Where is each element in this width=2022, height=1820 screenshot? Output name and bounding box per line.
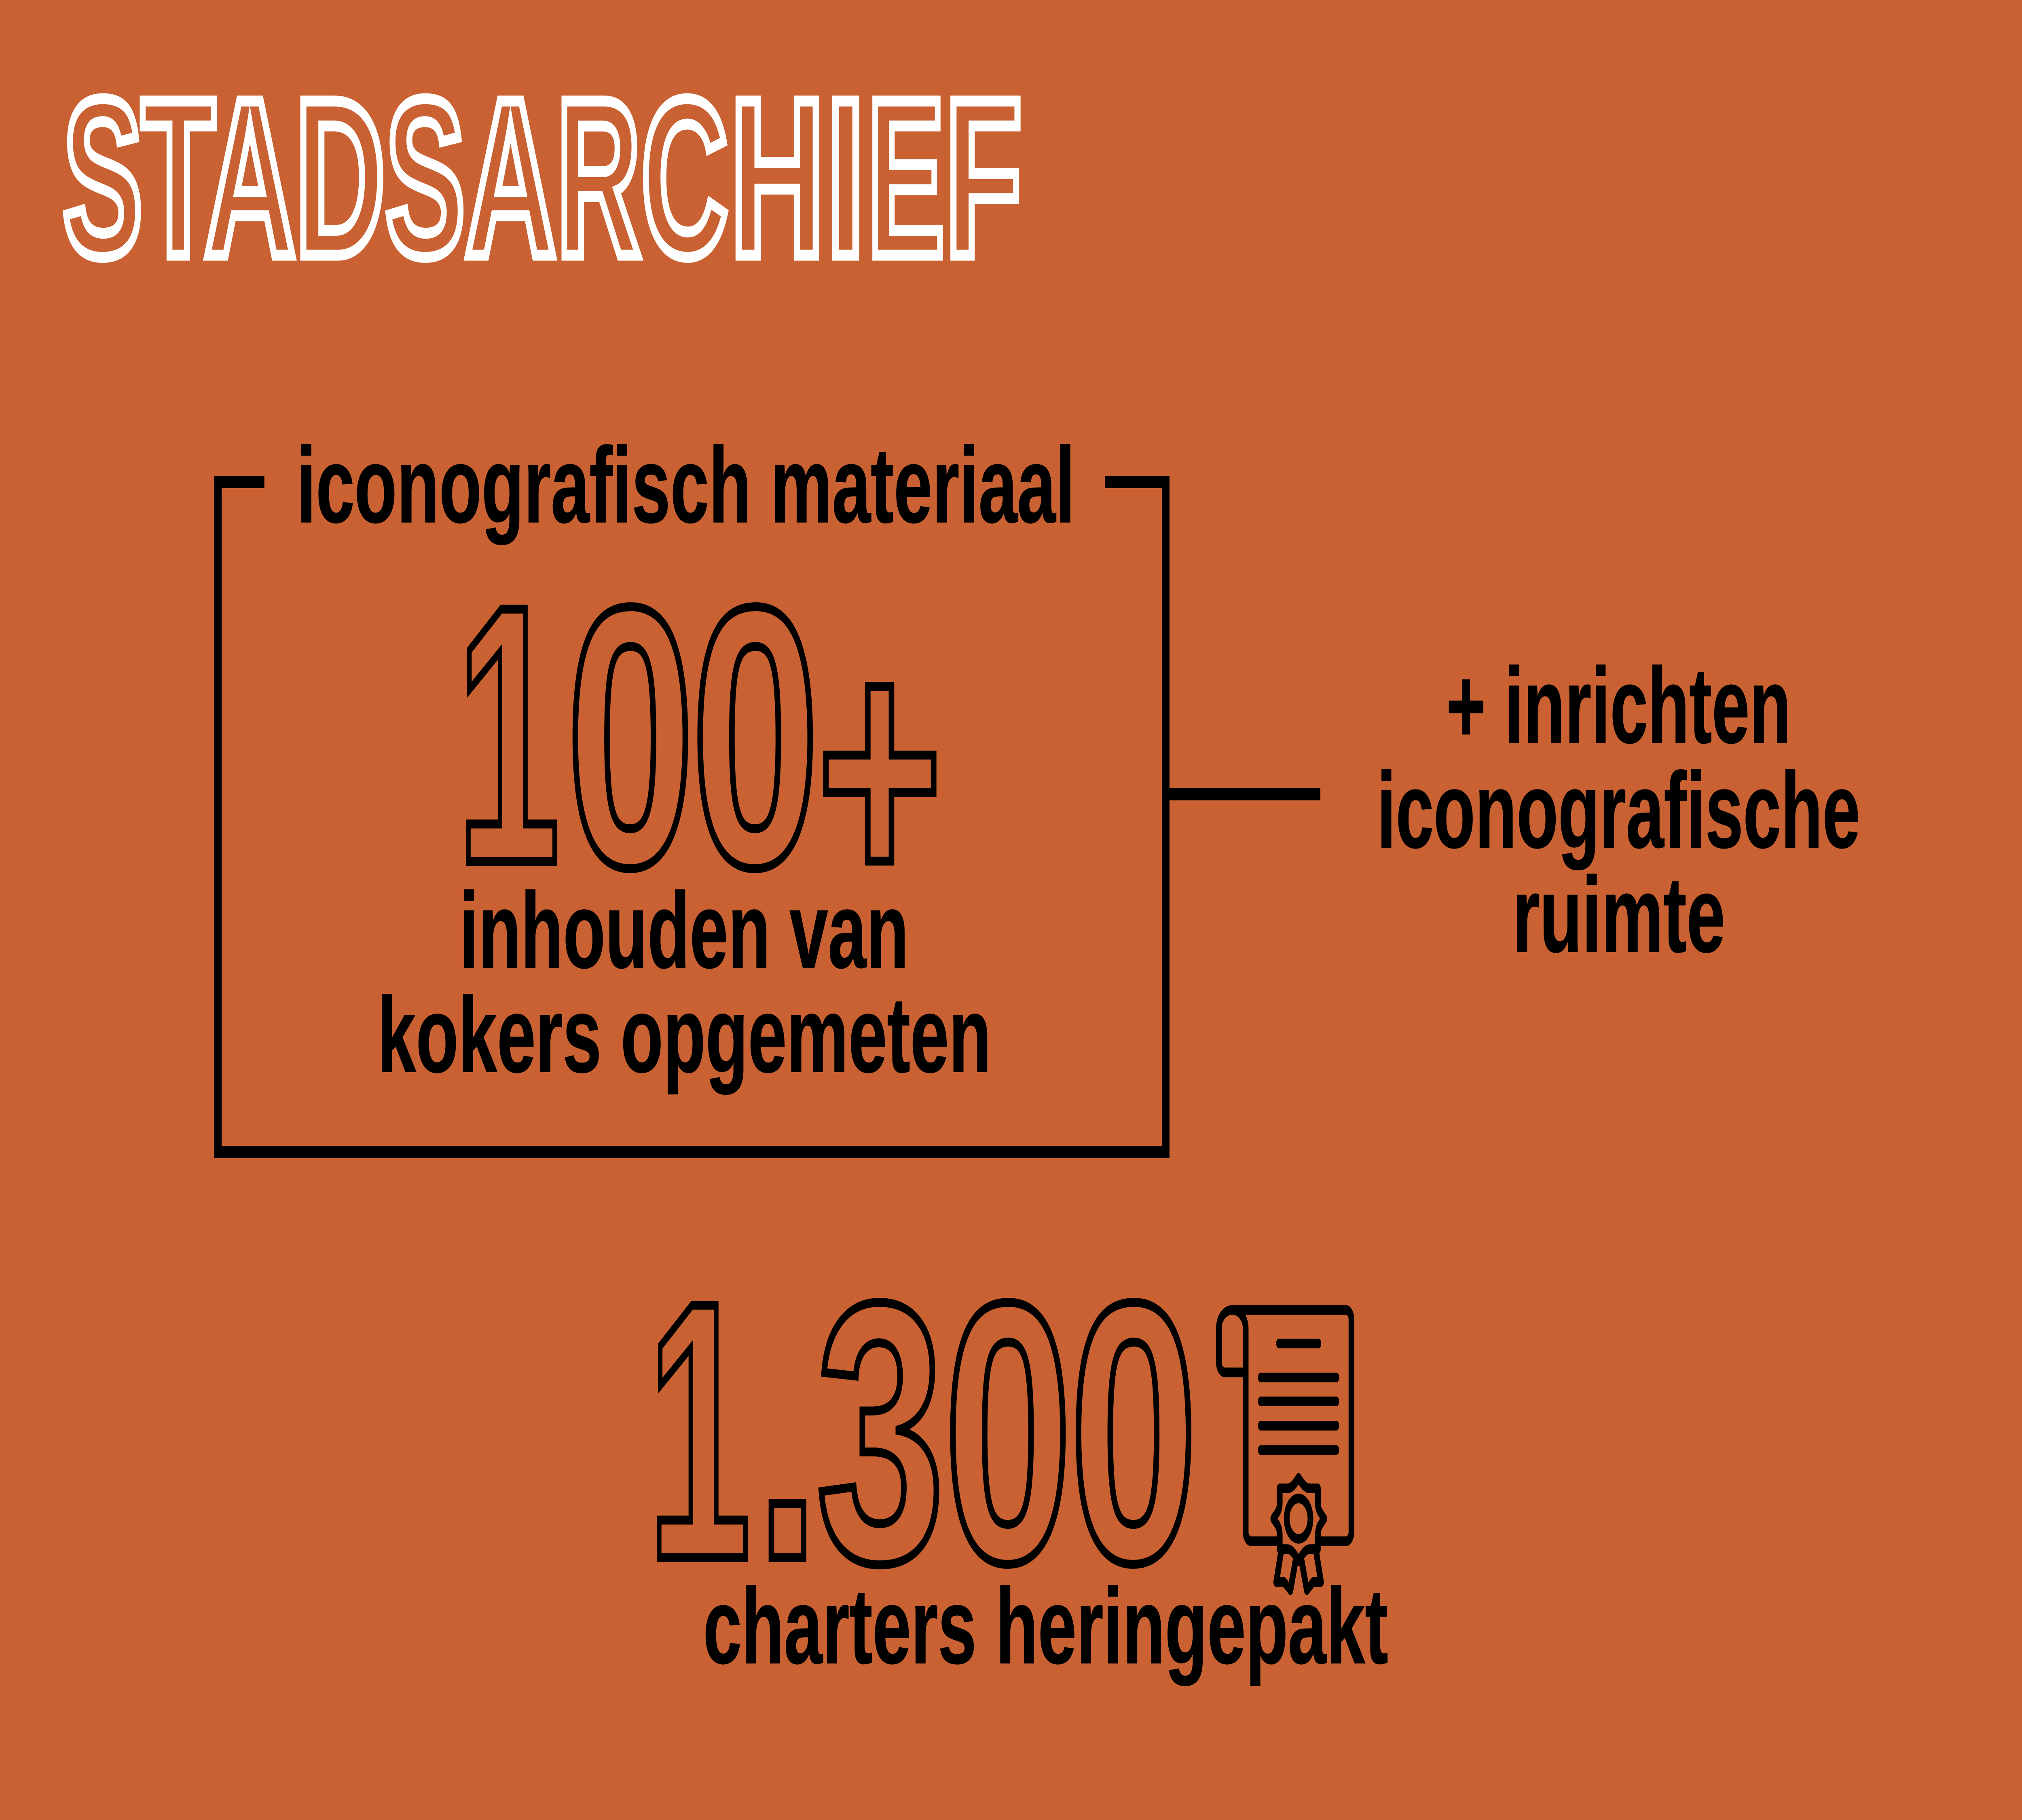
title: H bbox=[730, 53, 825, 303]
icon: charter scroll with seal bbox=[1219, 1310, 1352, 1590]
title: E bbox=[867, 53, 945, 303]
big number: 1.300: . bbox=[756, 1229, 819, 1635]
big number: 1.300: 300 bbox=[816, 1225, 1198, 1639]
caption: inhouden van kokers opgemeten bbox=[377, 870, 991, 1094]
title: C bbox=[641, 53, 728, 303]
title: I bbox=[826, 53, 865, 303]
title: A bbox=[204, 53, 296, 303]
big number: 100+: + bbox=[817, 577, 942, 961]
text block: + inrichten iconografische ruimte: + inrichten bbox=[1446, 645, 1791, 765]
text block: + inrichten iconografische ruimte: ruimte bbox=[1512, 855, 1725, 974]
title: A bbox=[465, 53, 556, 303]
big number: 100+: 00 bbox=[566, 530, 820, 944]
title: S bbox=[385, 53, 465, 303]
panel: iconografisch materiaal bbox=[218, 425, 1165, 1152]
title: S bbox=[63, 53, 143, 303]
title: D bbox=[295, 53, 385, 303]
title: R bbox=[556, 53, 641, 303]
panel heading: iconografisch materiaal bbox=[297, 425, 1075, 545]
text block: + inrichten iconografische ruimte bbox=[1377, 645, 1860, 974]
title: F bbox=[945, 53, 1022, 303]
caption: charters heringepakt: charters heringepakt bbox=[703, 1566, 1388, 1686]
title: T bbox=[141, 53, 215, 303]
bracket frame bbox=[218, 482, 1165, 1152]
caption: inhouden van kokers opgemeten: kokers opgemeten bbox=[377, 975, 991, 1094]
big number: 1.300: 1 bbox=[647, 1226, 751, 1636]
text block: + inrichten iconografische ruimte: iconografische bbox=[1377, 750, 1860, 870]
caption: inhouden van kokers opgemeten: inhouden van bbox=[459, 870, 909, 990]
connector line bbox=[1167, 788, 1320, 800]
big number: 100+: 1 bbox=[457, 530, 560, 940]
